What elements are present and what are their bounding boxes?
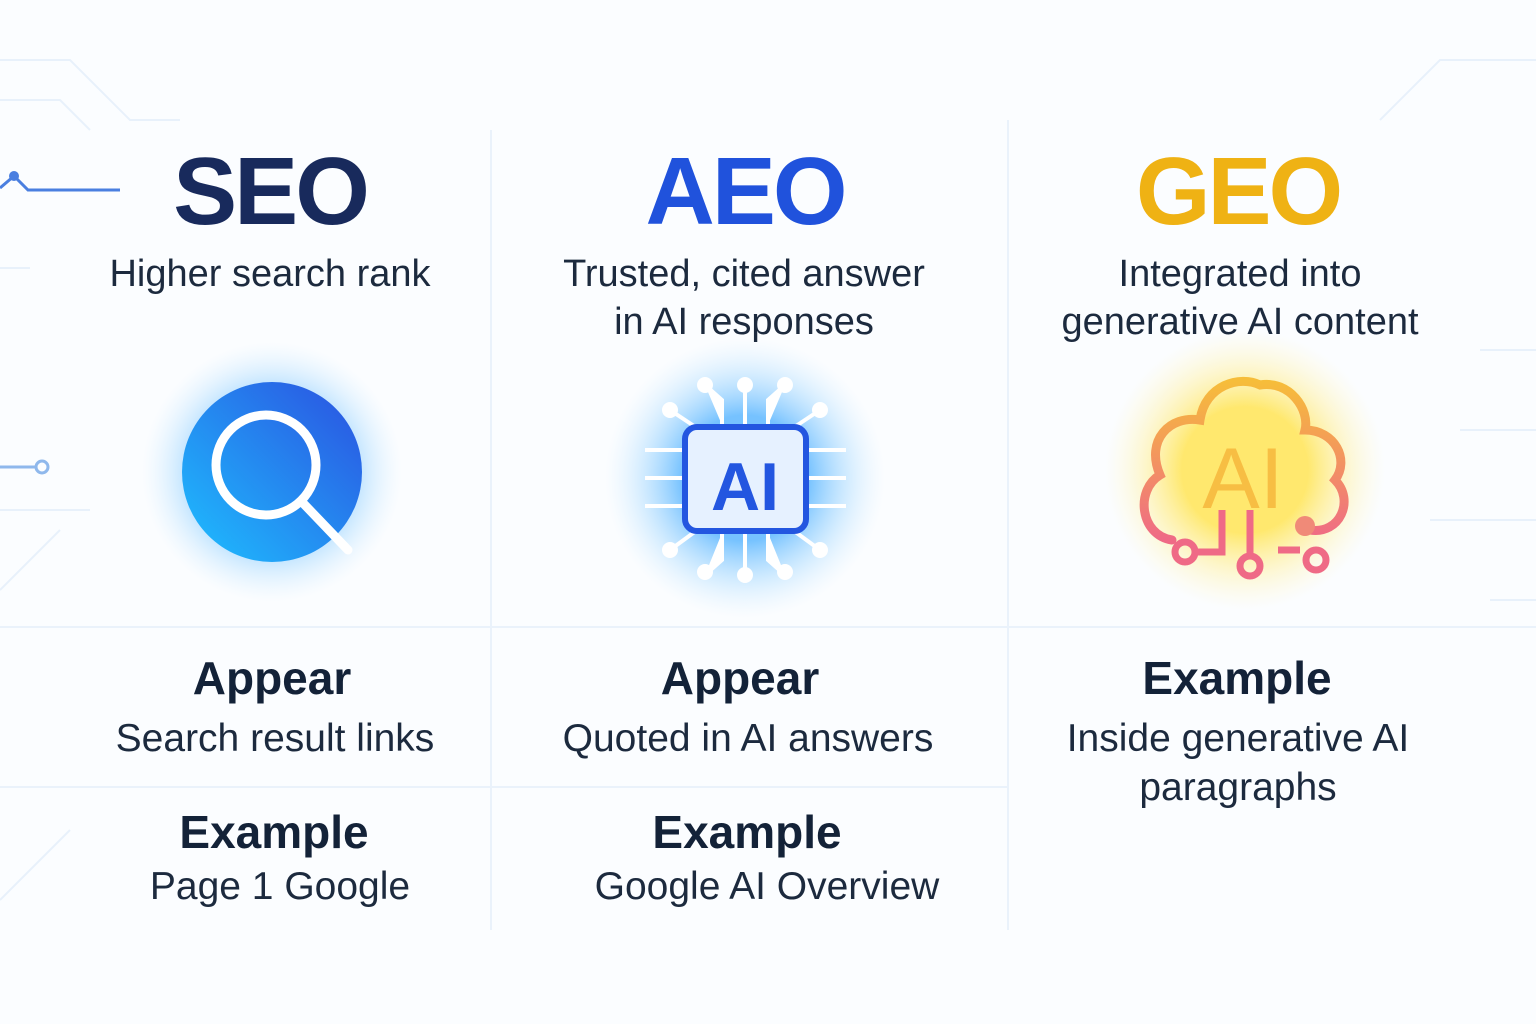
subtitle: AEO — [563, 253, 925, 343]
subtitle: AEO: Trusted, cited answer — [563, 253, 925, 295]
icon: AI cloud: AI — [1202, 431, 1284, 527]
heading: Example: Example — [1142, 652, 1332, 704]
text: inside generative AI: Inside generative AI — [1067, 717, 1409, 760]
title: GEO: GEO — [1136, 138, 1340, 245]
title: AEO: AEO — [645, 138, 845, 245]
column: GEO — [1061, 138, 1419, 809]
icon: AI cloud — [1105, 330, 1385, 610]
subtitle: GEO: generative AI content — [1061, 301, 1419, 343]
heading: Example: Example — [652, 806, 842, 858]
subtitle: AEO: in AI responses — [614, 301, 874, 343]
icon: magnifier — [142, 342, 402, 602]
dividers — [0, 120, 1536, 930]
subtitle: GEO: Integrated into — [1119, 253, 1361, 295]
column: SEO — [109, 138, 434, 908]
text: Page 1 Google: Page 1 Google — [150, 865, 410, 908]
title: SEO: SEO — [173, 138, 367, 245]
heading: Appear: Appear — [661, 652, 819, 704]
text: inside generative AI — [1067, 717, 1409, 809]
icon: AI chip: AI — [711, 449, 779, 525]
icon: AI chip — [605, 338, 885, 618]
heading: Appear: Appear — [193, 652, 351, 704]
text: inside generative AI: paragraphs — [1139, 766, 1337, 809]
text: search result links: Search result links — [116, 717, 434, 760]
subtitle: SEO: Higher search rank — [109, 253, 431, 295]
text: Google AI Overview: Google AI Overview — [595, 865, 939, 908]
text: quoted: Quoted in AI answers — [563, 717, 933, 760]
heading: Example: Example — [179, 806, 369, 858]
subtitle: GEO — [1061, 253, 1419, 343]
column: AEO — [563, 138, 940, 908]
